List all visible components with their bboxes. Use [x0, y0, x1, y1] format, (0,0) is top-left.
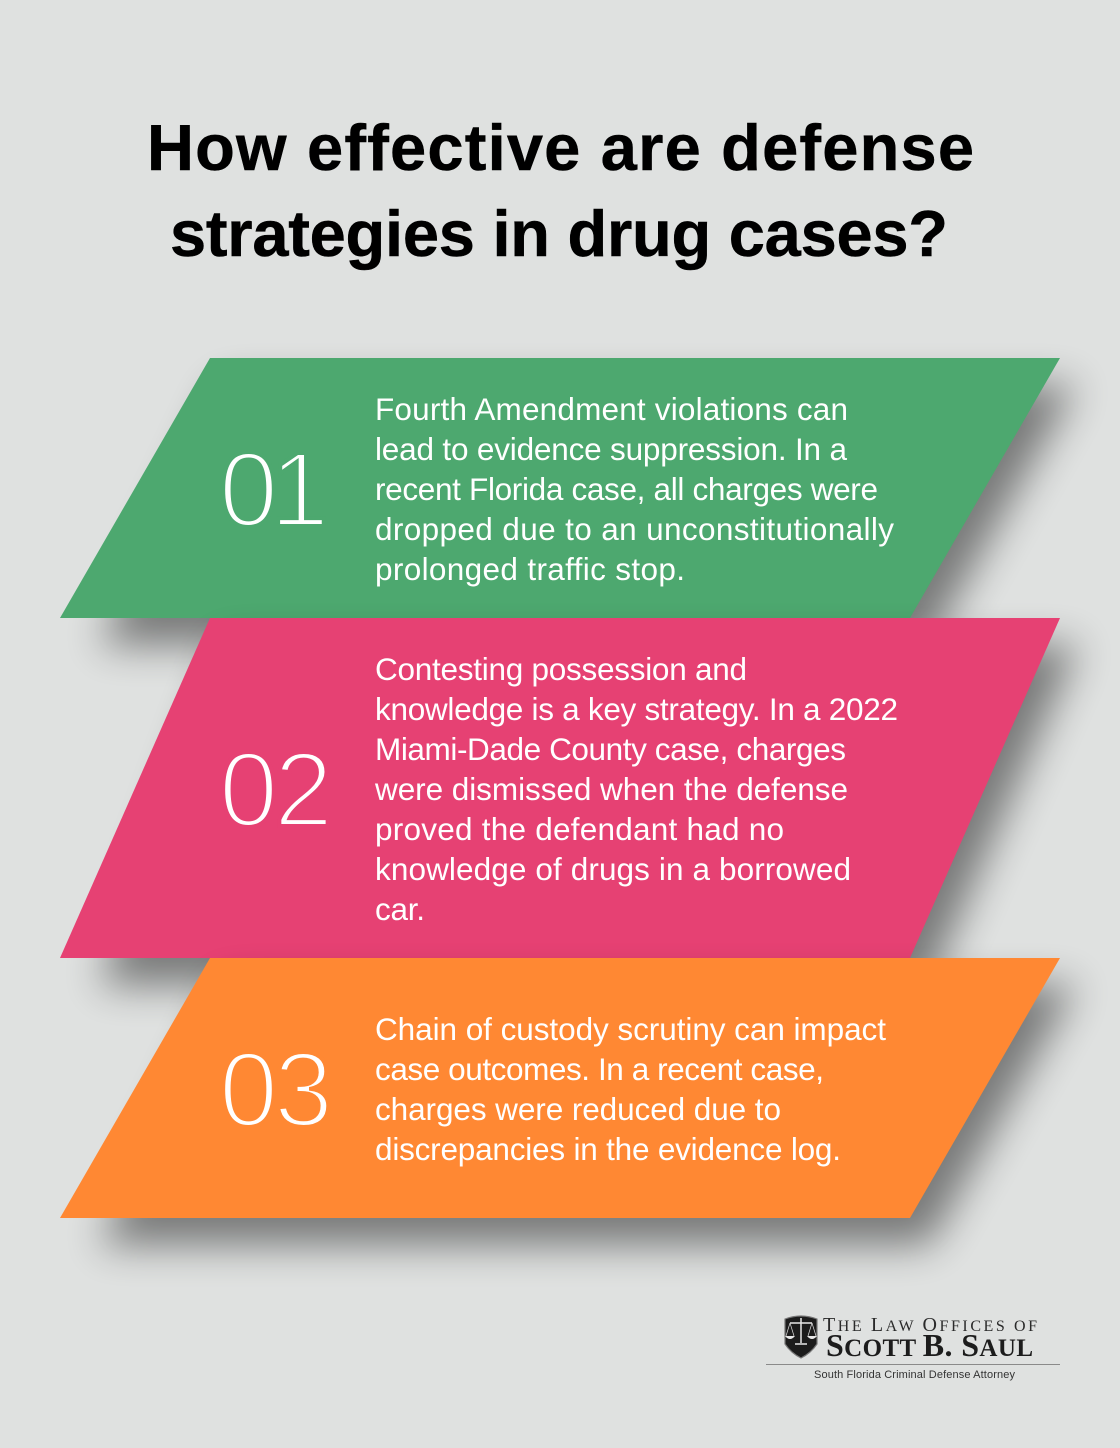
text: step 03 description: [375, 1011, 886, 1167]
text: step 01 description: dropped due to an unconstitutionally: [375, 511, 894, 547]
logo: The Law Offices of Scott B. Saul: [766, 1314, 1060, 1381]
panel shape: green parallelogram: [60, 358, 1060, 618]
title: [147, 111, 974, 270]
text: step 01 description: Fourth Amendment violations can: [375, 391, 848, 427]
logo text: the law offices of: THE LAW OFFICES OF: [823, 1314, 1037, 1336]
text: step 02 description: [374, 651, 898, 927]
logo text: scott b. saul: SCOTT B. SAUL: [826, 1327, 1033, 1363]
text: step 02 description: knowledge is a key strategy. In a 2022: [375, 691, 898, 727]
number 03: 03: [219, 1031, 333, 1149]
text: step 02 description: knowledge of drugs in a borrowed: [375, 851, 851, 887]
text: step 02 description: car.: [375, 891, 425, 927]
text: step 03 description: Chain of custody scrutiny can impact: [375, 1011, 886, 1047]
icon: shield with scales: [785, 1316, 817, 1358]
text: step 02 description: Contesting possession and: [375, 651, 747, 687]
panel: step 03: [60, 958, 1076, 1245]
text: step 03 description: charges were reduced due to: [375, 1091, 781, 1127]
text: step 01 description: lead to evidence suppression. In a: [375, 431, 847, 467]
text: step 03 description: discrepancies in the evidence log.: [375, 1131, 841, 1167]
logo tagline: South Florida Criminal Defense Attorney: [814, 1369, 1016, 1381]
panel: step 02: [60, 618, 1078, 985]
text: step 03 description: case outcomes. In a recent case,: [375, 1051, 824, 1087]
text: step 02 description: were dismissed when the defense: [374, 771, 848, 807]
number 02: 02: [219, 731, 333, 849]
number 01: 01: [219, 431, 329, 549]
panel shape: orange parallelogram: [60, 958, 1060, 1218]
text: step 01 description: recent Florida case, all charges were: [375, 471, 878, 507]
panel: step 01: [60, 358, 1076, 645]
text: step 01 description: [375, 391, 894, 587]
text: step 02 description: Miami-Dade County case, charges: [375, 731, 846, 767]
text: step 01 description: prolonged traffic stop.: [375, 551, 685, 587]
title: strategies in drug cases?: [170, 197, 948, 270]
panel shape: pink parallelogram: [60, 618, 1060, 958]
text: step 02 description: proved the defendant had no: [375, 811, 784, 847]
title: How effective are defense: [147, 111, 974, 184]
